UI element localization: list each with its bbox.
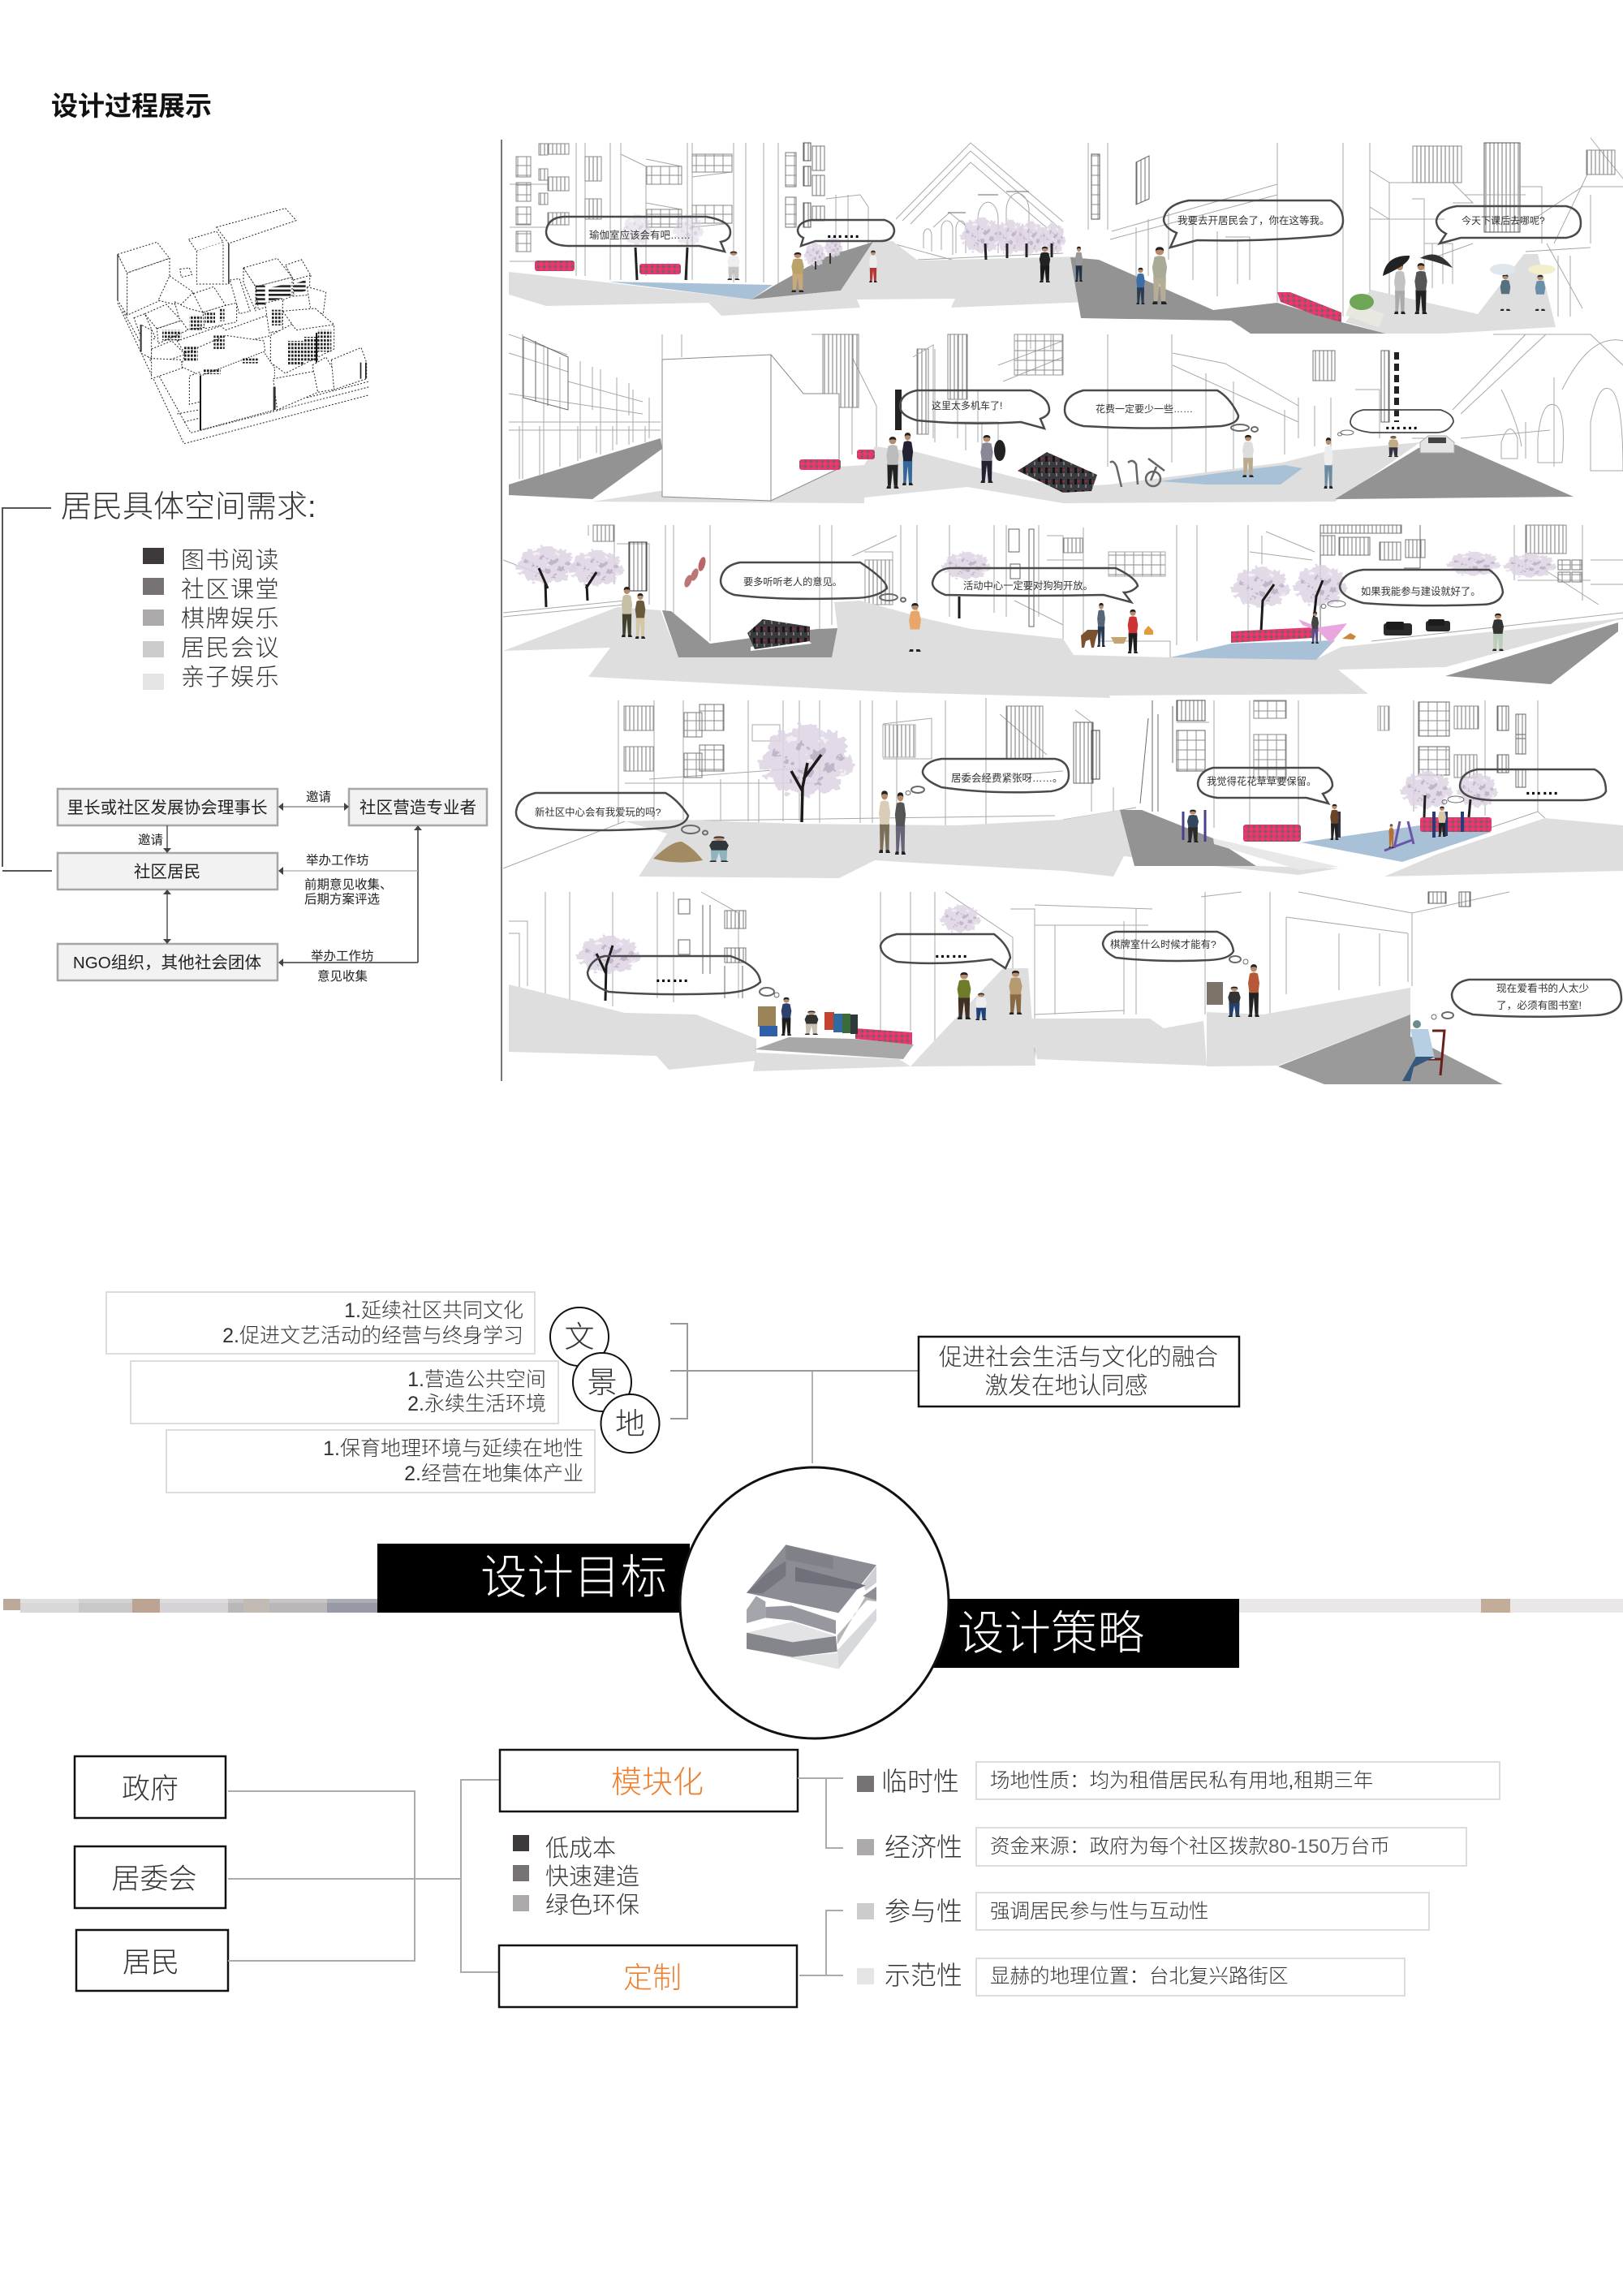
strategy item: demonstrative: 显赫的地理位置：台北复兴路街区 [990,1965,1289,1988]
speech bubbles row 4: …… [1525,780,1559,799]
box: culture: 1.延续社区共同文化 [344,1299,523,1322]
speech bubbles row 5: …… [655,967,689,986]
box: landscape [131,1361,558,1424]
speech bubbles row 4: 新社区中心会有我爱玩的吗? [535,806,661,818]
strategy item: demonstrative: 示范性 [885,1961,962,1990]
speech bubbles row 4 [516,759,1606,834]
row 3 flower beds [1231,627,1313,643]
speech bubbles row 1: …… [826,223,860,242]
row 1 building linework [510,138,1623,317]
speech bubbles row 5 [588,932,1621,1019]
row 2 motorcycles and bicycles [1018,452,1165,493]
stakeholder boxes [75,1756,228,1991]
box: residents [76,1930,228,1991]
box: place: 2.经营在地集体产业 [404,1462,583,1485]
bracket and connector to goal statement [670,1324,919,1463]
box: modular [500,1750,798,1811]
strategy item: participatory: 强调居民参与性与互动性 [990,1900,1209,1923]
speech bubbles row 3 [721,562,1503,609]
row 1 flower beds [535,261,1341,322]
speech bubbles row 2 [900,390,1453,436]
flow labels: 后期方案评选 [304,892,380,907]
row 5 trees [577,905,980,1001]
scene row 4 [503,698,1623,878]
culture goal boxes [106,1292,595,1493]
row 4 building linework [503,698,1547,868]
box: NGO: NGO组织，其他社会团体 [73,954,262,972]
goal banner: 设计目标 [480,1552,667,1604]
scene row 3 [503,525,1623,698]
strategy connectors [798,1778,843,1975]
strategy item: participatory [857,1893,1429,1930]
legend: modular features: 低成本 [545,1835,616,1862]
speech bubbles row 2: 花费一定要少一些…… [1096,403,1193,415]
box: culture [106,1292,535,1354]
axonometric site drawing [117,209,369,444]
row 5 people [781,964,1444,1081]
row 4 pavement [625,810,1623,878]
flow labels: 邀请 [138,833,163,847]
scene row 1 [509,138,1623,334]
decorative band left [3,1599,377,1613]
speech bubbles row 2: …… [1384,415,1419,433]
row 3 trees [515,545,1556,631]
legend: modular features: 绿色环保 [545,1892,639,1919]
strategy item: temporary: 临时性 [881,1767,959,1796]
scene row 2 [509,334,1623,503]
central circle with stacked box icon [680,1467,949,1738]
row 3 objects: motorcycles, discs, sofas [683,556,1450,651]
speech bubbles row 5: 了，必须有图书室! [1496,999,1582,1011]
decorative band right [1239,1599,1623,1613]
strategy banner: 设计策略 [958,1608,1144,1660]
row 1 people [727,247,1545,314]
legend: space needs: 图书阅读 [181,547,280,574]
legend: space needs: 居民会议 [181,635,280,661]
title: 设计过程展示 [51,91,212,121]
goal statement box [919,1337,1239,1406]
heading: resident space needs: 居民具体空间需求: [61,490,316,524]
box: place [166,1430,595,1493]
box: landscape: 1.营造公共空间 [407,1368,546,1391]
vertical divider [501,140,502,1081]
speech bubbles row 4: 居委会经费紧张呀……。 [951,772,1063,784]
speech bubbles row 5: …… [934,943,968,962]
strategy item: economic [857,1828,1466,1866]
row 5 pavement [509,968,1503,1084]
legend: space needs [143,547,280,691]
speech bubbles row 1 [546,200,1581,252]
goal statement box: 促进社会生活与文化的融合 [939,1345,1218,1371]
box: landscape: 2.永续生活环境 [407,1393,546,1415]
row 5 building linework [509,892,1509,1063]
box: government: 政府 [122,1773,179,1805]
row 4 objects: soil pile, fitness equipment [653,810,1462,863]
box: residents: 居民 [123,1947,179,1979]
speech bubbles row 3: 要多听听老人的意见。 [743,575,842,588]
speech bubbles row 5: 棋牌室什么时候才能有? [1110,938,1216,950]
flow chart: actors [58,789,487,984]
legend: modular features [513,1835,639,1919]
row 5 objects: bins and recyclables [758,1006,858,1036]
box: residents: 社区居民 [134,863,200,881]
speech bubbles row 2: 这里太多机车了! [932,399,1002,411]
goal banner [377,1544,690,1613]
strategy item: economic: 经济性 [885,1833,962,1862]
row 3 people [622,587,1504,653]
circles: 文 景 地: 景 [588,1366,617,1399]
speech bubbles row 5: 现在爱看书的人太少 [1496,982,1589,994]
strategy banner [933,1599,1239,1668]
row 2 building linework [509,334,1623,479]
circles: 文 景 地: 地 [615,1407,645,1441]
flow labels: 前期意见收集、 [304,877,393,892]
strategy item: temporary: 场地性质：均为租借居民私有用地,租期三年 [990,1769,1373,1792]
row 3 pavement [503,601,1623,698]
box: customised [499,1945,797,2007]
strategy item: temporary [857,1762,1500,1799]
flow labels: 举办工作坊 [311,949,374,963]
box: head of community [58,789,278,825]
row 1 trees [622,214,1065,280]
row 4 trees [760,723,1497,822]
row 2 people and car [886,433,1454,489]
box: community builder [349,789,487,825]
legend: space needs: 亲子娱乐 [181,664,280,691]
strategy item: demonstrative [857,1958,1405,1996]
row 5 flower bed [855,1028,912,1045]
flow labels [138,790,393,984]
flow labels: 邀请 [306,790,331,804]
row 3 building linework [503,525,1623,660]
legend: space needs: 社区课堂 [181,576,280,603]
box: neighbourhood committee: 居委会 [111,1863,197,1895]
legend: space needs: 棋牌娱乐 [181,605,280,632]
axonometric window hatching [117,243,367,430]
row 2 flower beds [799,450,875,470]
box: government [75,1756,226,1818]
strategy item: economic: 资金来源：政府为每个社区拨款80-150万台币 [990,1835,1390,1858]
icon: stacked translucent volume [747,1544,876,1669]
scene row 5 [509,892,1621,1084]
flow arrows [163,803,422,967]
box: head of community: 里长或社区发展协会理事长 [67,799,268,817]
speech bubbles row 1: 今天下课后去哪呢? [1462,214,1545,226]
speech bubbles row 1: 我要去开居民会了，你在这等我。 [1177,214,1330,226]
box: NGO [58,944,278,980]
box: culture: 2.促进文艺活动的经营与终身学习 [222,1325,523,1347]
box: customised: 定制 [623,1961,682,1994]
row 4 flower beds [1243,817,1492,842]
box: residents [58,853,278,890]
box: neighbourhood committee [75,1846,226,1908]
stakeholder connectors [228,1780,499,1972]
flow labels: 意见收集 [317,968,368,984]
box: place: 1.保育地理环境与延续在地性 [323,1437,583,1460]
speech bubbles row 3: 如果我能参与建设就好了。 [1361,585,1481,597]
goal statement box: 激发在地认同感 [985,1373,1147,1399]
speech bubbles row 3: 活动中心一定要对狗狗开放。 [963,579,1093,592]
row 1 pavement [509,241,1556,334]
flow labels: 举办工作坊 [306,853,369,868]
box: community builder: 社区营造专业者 [359,799,476,817]
strategy item: participatory: 参与性 [885,1897,962,1926]
legend: modular features: 快速建造 [545,1863,639,1890]
circles: 文 景 地 [550,1307,659,1453]
row 2 pavement [509,355,1573,503]
row 1 umbrellas and planters [1345,255,1556,328]
connector from needs heading to residents box [2,508,52,871]
row 4 people [709,790,1446,862]
speech bubbles row 4: 我觉得花花草草要保留。 [1207,775,1316,787]
circles: 文 景 地: 文 [565,1320,594,1354]
box: modular: 模块化 [611,1766,704,1800]
speech bubbles row 1: 瑜伽室应该会有吧…… [589,229,691,241]
